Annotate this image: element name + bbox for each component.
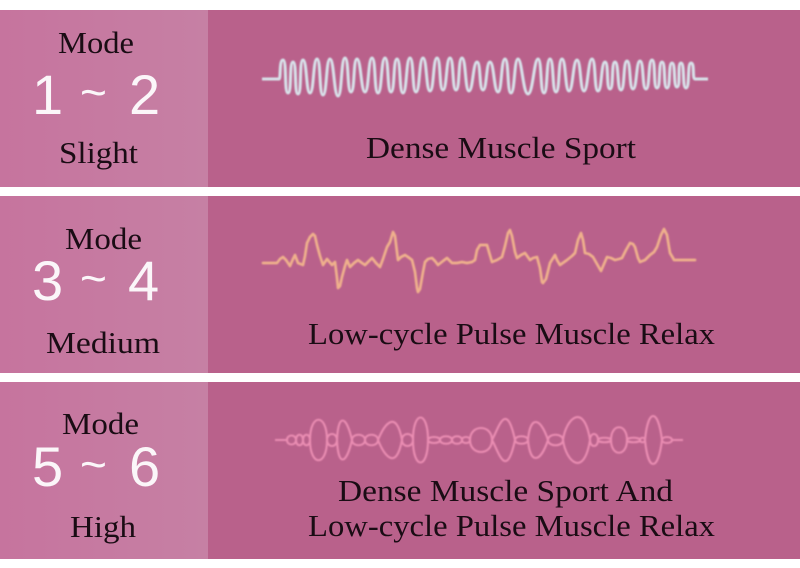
description: Dense Muscle Sport: Dense Muscle Sport xyxy=(366,131,637,165)
range: 3 ~ 4: ~ xyxy=(80,252,107,304)
mode label column xyxy=(0,382,208,559)
range: 1 ~ 2: ~ xyxy=(80,66,107,118)
range: 3 ~ 4 xyxy=(32,249,159,312)
range: 1 ~ 2: 1 xyxy=(32,63,63,126)
heading: Mode: Mode xyxy=(62,407,139,441)
mode label column xyxy=(0,10,208,187)
range: 1 ~ 2: 2 xyxy=(129,63,160,126)
intensity: Slight: Slight xyxy=(59,136,139,170)
panel: mode 1-2 slight xyxy=(0,10,800,187)
waveform: dense plus low-cycle envelope xyxy=(275,416,683,464)
intensity: High: High xyxy=(70,510,136,544)
range: 1 ~ 2 xyxy=(32,63,160,126)
description column xyxy=(208,10,800,187)
waveform: dense oscillation xyxy=(262,58,708,96)
range: 5 ~ 6 xyxy=(32,435,160,498)
range: 5 ~ 6: 6 xyxy=(129,435,160,498)
panel: mode 5-6 high xyxy=(0,382,800,559)
range: 5 ~ 6: 5 xyxy=(32,435,63,498)
description column xyxy=(208,382,800,559)
range: 3 ~ 4: 4 xyxy=(128,249,159,312)
panel: mode 3-4 medium xyxy=(0,196,800,373)
description: two-line combined mode text xyxy=(308,474,715,543)
description: two-line combined mode text: Dense Muscle Sport And xyxy=(338,474,673,508)
range: 3 ~ 4: 3 xyxy=(32,249,63,312)
heading: Mode: Mode xyxy=(58,26,134,60)
description: Low-cycle Pulse Muscle Relax: Low-cycle Pulse Muscle Relax xyxy=(308,317,715,351)
description column xyxy=(208,196,800,373)
description: two-line combined mode text: Low-cycle Pulse Muscle Relax xyxy=(308,509,715,543)
intensity: Medium: Medium xyxy=(46,326,160,360)
waveform: low-cycle pulse xyxy=(263,229,695,292)
range: 5 ~ 6: ~ xyxy=(80,438,107,490)
heading: Mode: Mode xyxy=(65,222,142,256)
mode label column xyxy=(0,196,208,373)
